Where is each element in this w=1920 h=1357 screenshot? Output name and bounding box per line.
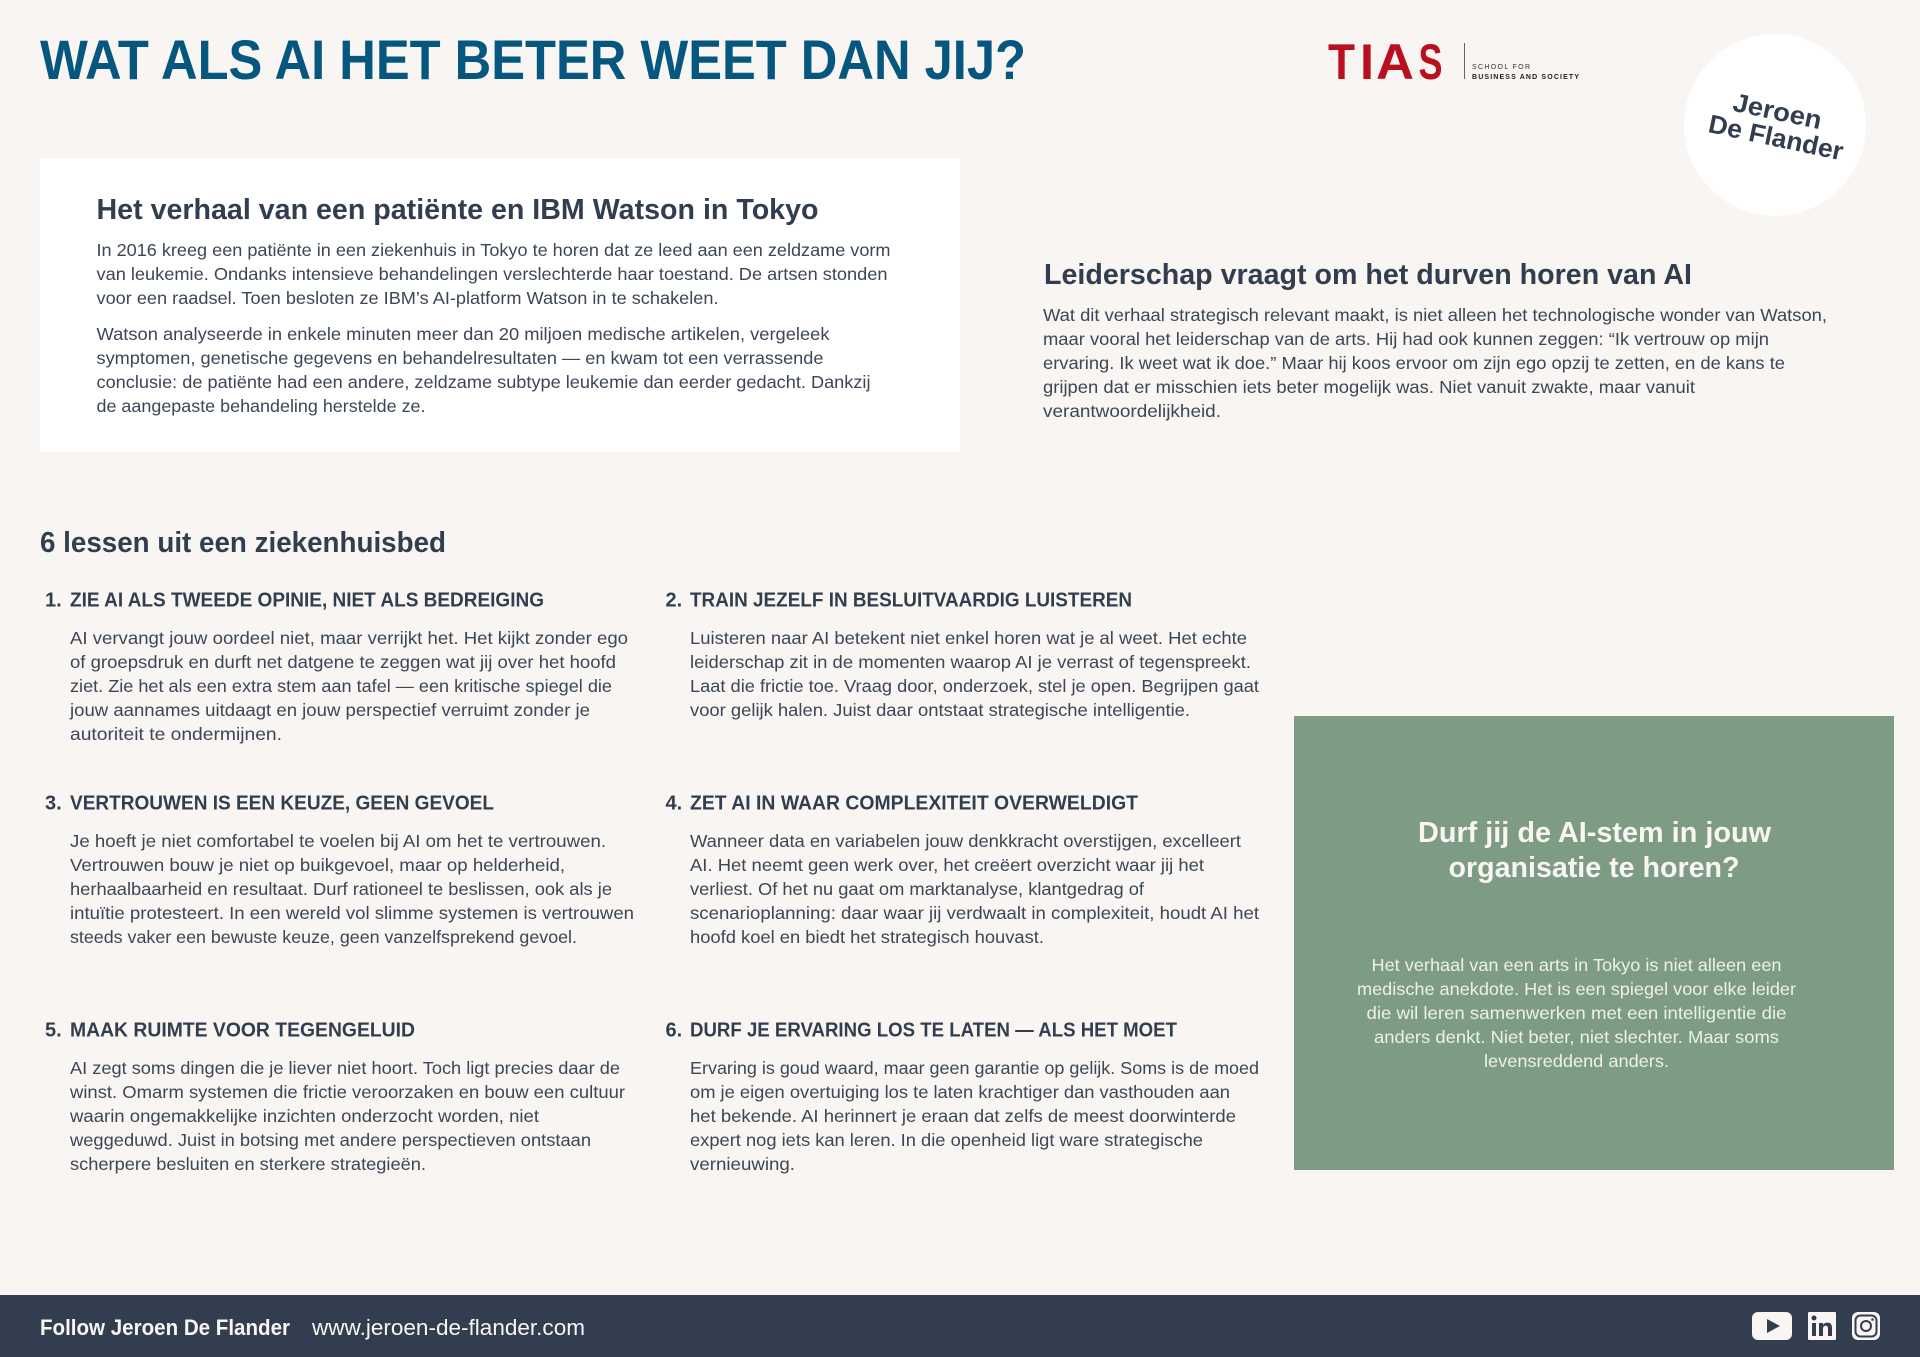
lesson 6: DURF JE ERVARING LOS TE LATEN — ALS HET MOET: [690, 1020, 1177, 1042]
lesson 2: 2.: [666, 590, 682, 612]
call to action heading: [1418, 817, 1771, 884]
lesson 2: [666, 590, 1259, 720]
lesson 2: leiderschap zit in de momenten waarop AI je verrast of tegenspreekt.: [690, 652, 1251, 672]
leadership text: verantwoordelijkheid.: [1043, 401, 1221, 421]
lessons heading: 6 lessen uit een ziekenhuisbed: [40, 527, 446, 559]
follow label: Follow Jeroen De Flander: [40, 1315, 290, 1340]
call to action text: levensreddend anders.: [1484, 1051, 1669, 1071]
panel: call to action: [1294, 716, 1894, 1170]
lesson 1: jouw aannames uitdaagt en jouw perspectief verruimt zonder je: [69, 700, 590, 720]
footer bar: [0, 1295, 1920, 1357]
panel: leadership: [1043, 259, 1827, 421]
lesson 1: autoriteit te ondermijnen.: [70, 724, 282, 744]
lesson 3: intuïtie protesteert. In een wereld vol slimme systemen is vertrouwen: [70, 903, 634, 923]
author badge: Jeroen: [1730, 87, 1825, 135]
lesson 6: 6.: [666, 1020, 682, 1042]
icon: LinkedIn: [1808, 1312, 1836, 1340]
logo: TIAS School for Business and Society: S: [1418, 34, 1442, 90]
lesson 5: 5.: [45, 1020, 62, 1042]
leadership text: Wat dit verhaal strategisch relevant maakt, is niet alleen het technologische wonder van Watson,: [1043, 305, 1827, 325]
call to action text: anders denkt. Niet beter, niet slechter. Maar soms: [1374, 1027, 1779, 1047]
author badge: [1684, 34, 1866, 216]
call to action text: [1357, 955, 1796, 1071]
call to action text: Het verhaal van een arts in Tokyo is niet alleen een: [1372, 955, 1782, 975]
leadership text: grijpen dat er misschien iets beter mogelijk was. Niet vanuit zwakte, maar vanuit: [1043, 377, 1695, 397]
lesson 4: [666, 792, 1259, 947]
story text: voor een raadsel. Toen besloten ze IBM’s AI-platform Watson in te schakelen.: [96, 288, 718, 308]
lesson 4: Wanneer data en variabelen jouw denkkracht overstijgen, excelleert: [690, 831, 1241, 851]
logo: TIAS School for Business and Society: SCHOOL FOR: [1472, 64, 1530, 71]
lesson 5: waarin ongemakkelijke inzichten onderzocht worden, niet: [69, 1106, 539, 1126]
story text: Watson analyseerde in enkele minuten meer dan 20 miljoen medische artikelen, vergeleek: [96, 324, 830, 344]
lesson 2: TRAIN JEZELF IN BESLUITVAARDIG LUISTEREN: [690, 590, 1132, 612]
story text: symptomen, genetische gegevens en behandelresultaten — en kwam tot een verrassende: [96, 348, 824, 368]
lesson 3: 3.: [45, 792, 62, 814]
lesson 6: Ervaring is goud waard, maar geen garantie op gelijk. Soms is de moed: [690, 1058, 1259, 1078]
lesson 5: winst. Omarm systemen die frictie veroorzaken en bouw een cultuur: [69, 1082, 625, 1102]
leadership text: [1043, 305, 1827, 421]
lesson 6: om je eigen overtuiging los te laten krachtiger dan vasthouden aan: [690, 1082, 1230, 1102]
panel: story of the patient and IBM Watson: [40, 158, 960, 452]
website: www.jeroen-de-flander.com: [311, 1315, 585, 1340]
lesson 5: scherpere besluiten en sterkere strategieën.: [70, 1154, 426, 1174]
lesson 4: hoofd koel en biedt het strategisch houvast.: [690, 927, 1044, 947]
lesson 6: expert nog iets kan leren. In die openheid ligt ware strategische: [690, 1130, 1203, 1150]
lesson 5: weggeduwd. Juist in botsing met andere perspectieven ontstaan: [69, 1130, 591, 1150]
call to action heading: organisatie te horen?: [1448, 852, 1740, 884]
lesson 2: voor gelijk halen. Juist daar ontstaat strategische intelligentie.: [690, 700, 1190, 720]
lesson 6: vernieuwing.: [690, 1154, 795, 1174]
lesson 1: 1.: [45, 590, 62, 612]
logo: TIAS School for Business and Society: A: [1376, 34, 1414, 90]
lesson 4: 4.: [666, 792, 682, 814]
lesson 2: Luisteren naar AI betekent niet enkel horen wat je al weet. Het echte: [690, 628, 1247, 648]
call to action text: die wil leren samenwerken met een intelligentie die: [1366, 1003, 1786, 1023]
lesson 3: VERTROUWEN IS EEN KEUZE, GEEN GEVOEL: [70, 792, 494, 814]
lesson 3: [45, 792, 634, 947]
lesson 4: ZET AI IN WAAR COMPLEXITEIT OVERWELDIGT: [690, 792, 1138, 814]
lesson 1: of groepsdruk en durft net datgene te zeggen wat jij over het hoofd: [70, 652, 616, 672]
leadership text: maar vooral het leiderschap van de arts. Hij had ook kunnen zeggen: “Ik vertrouw op mijn: [1043, 329, 1769, 349]
story text: van leukemie. Ondanks intensieve behandelingen verslechterde haar toestand. De artsen stonden: [96, 264, 888, 284]
logo: TIAS School for Business and Society: [1328, 34, 1579, 90]
story text: conclusie: de patiënte had een andere, zeldzame subtype leukemie dan eerder gedacht. Dankzij: [96, 372, 870, 392]
story text: In 2016 kreeg een patiënte in een ziekenhuis in Tokyo te horen dat ze leed aan een zeldzame vorm: [96, 240, 890, 260]
icon: Instagram: [1852, 1312, 1880, 1340]
lesson 4: verliest. Of het nu gaat om marktanalyse, klantgedrag of: [690, 879, 1144, 899]
title: WAT ALS AI HET BETER WEET DAN JIJ?: [40, 28, 1026, 91]
lesson 2: Laat die frictie toe. Vraag door, onderzoek, stel je open. Begrijpen gaat: [690, 676, 1259, 696]
lesson 3: Je hoeft je niet comfortabel te voelen bij AI om het te vertrouwen.: [70, 831, 606, 851]
logo: TIAS School for Business and Society: BUSINESS AND SOCIETY: [1472, 74, 1579, 81]
lesson 1: ziet. Zie het als een extra stem aan tafel — een kritische spiegel die: [70, 676, 612, 696]
call to action text: medische anekdote. Het is een spiegel voor elke leider: [1357, 979, 1796, 999]
lesson 1: [45, 590, 628, 744]
lesson 1: ZIE AI ALS TWEEDE OPINIE, NIET ALS BEDREIGING: [70, 590, 544, 612]
lesson 5: MAAK RUIMTE VOOR TEGENGELUID: [70, 1020, 415, 1042]
lesson 6: het bekende. AI herinnert je eraan dat zelfs de meest doorwinterde: [690, 1106, 1236, 1126]
lesson 4: AI. Het neemt geen werk over, het creëert overzicht waar jij het: [690, 855, 1204, 875]
lesson 3: herhaalbaarheid en resultaat. Durf rationeel te beslissen, ook als je: [70, 879, 612, 899]
story text: de aangepaste behandeling herstelde ze.: [96, 396, 426, 416]
lesson 1: AI vervangt jouw oordeel niet, maar verrijkt het. Het kijkt zonder ego: [70, 628, 628, 648]
author badge: De Flander: [1706, 108, 1846, 166]
lesson 3: steeds vaker een bewuste keuze, geen vanzelfsprekend gevoel.: [70, 927, 577, 947]
call to action heading: Durf jij de AI-stem in jouw: [1418, 817, 1771, 849]
story heading: Het verhaal van een patiënte en IBM Watson in Tokyo: [96, 194, 818, 226]
logo: TIAS School for Business and Society: T: [1328, 34, 1355, 90]
lesson 5: AI zegt soms dingen die je liever niet hoort. Toch ligt precies daar de: [70, 1058, 620, 1078]
story text: [96, 240, 890, 416]
leadership text: ervaring. Ik weet wat ik doe.” Maar hij koos ervoor om zijn ego opzij te zetten, en de kans te: [1043, 353, 1785, 373]
leadership heading: Leiderschap vraagt om het durven horen van AI: [1044, 259, 1692, 291]
lesson 3: Vertrouwen bouw je niet op buikgevoel, maar op helderheid,: [70, 855, 565, 875]
logo: TIAS School for Business and Society: I: [1360, 34, 1374, 90]
lesson 6: [666, 1020, 1259, 1174]
icon: YouTube: [1752, 1312, 1792, 1340]
lesson 4: scenarioplanning: daar waar jij verdwaalt in complexiteit, houdt AI het: [690, 903, 1259, 923]
lesson 5: [45, 1020, 625, 1174]
